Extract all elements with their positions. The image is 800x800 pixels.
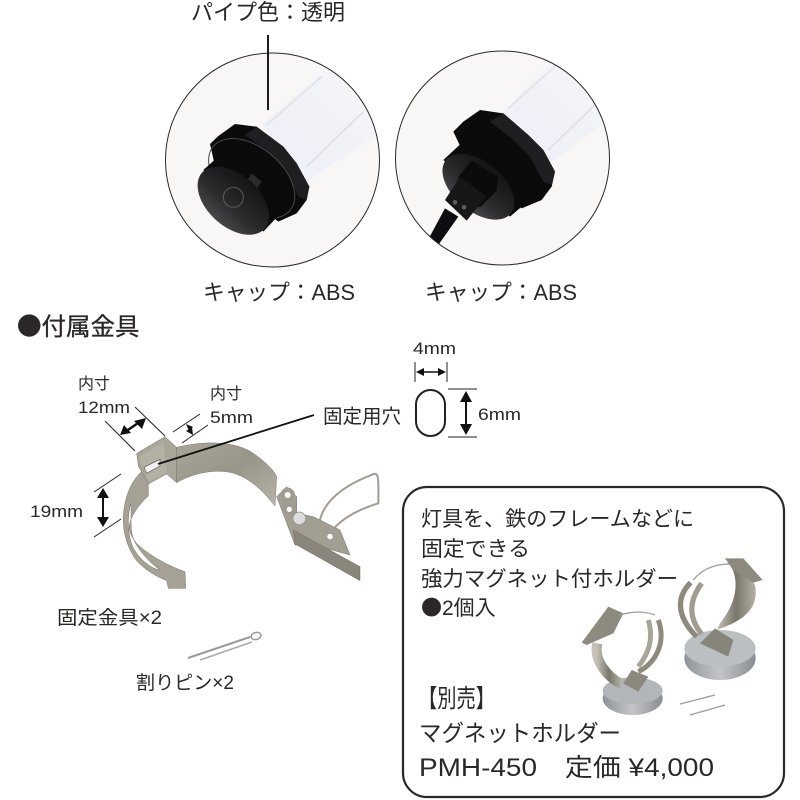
caption: bracket x2: 固定金具×2 (57, 607, 162, 629)
caption: left cap: キャップ：ABS (203, 280, 355, 305)
main band (177, 443, 277, 506)
cotter pins (680, 695, 725, 715)
cable (429, 208, 458, 245)
panel text: sold separately and price: 【別売】 (418, 685, 495, 713)
diagram: oval hole dimension (413, 339, 521, 437)
dimension: inner 12mm: 12mm (78, 398, 130, 417)
top tab (137, 437, 177, 484)
cap body right (443, 144, 521, 217)
flange ring left (208, 138, 296, 218)
diagram: fixing bracket (123, 437, 378, 588)
label: 6mm: 6mm (478, 405, 521, 424)
panel: right cap circle photo with cable (396, 51, 617, 265)
photo: magnet holders (582, 558, 763, 715)
callout: fixing hole: 固定用穴 (323, 406, 401, 428)
callout: fixing hole (158, 406, 401, 464)
dimension: inner 5mm (173, 385, 253, 443)
latch strip (277, 487, 350, 555)
label: 4mm: 4mm (413, 339, 456, 358)
dimension: inner 12mm: 内寸 (78, 375, 110, 393)
dimension: inner 12mm (78, 375, 165, 451)
hex nut left (210, 124, 309, 222)
leader line: pipe colour (267, 35, 269, 110)
panel text: sold separately and price: PMH-450 定価 ¥4,000 (419, 754, 714, 782)
hex gland nut (458, 161, 498, 207)
cable gland (445, 177, 486, 221)
dimension: 19mm (30, 474, 121, 537)
pipe right (502, 104, 566, 162)
left magnet holder (582, 607, 663, 715)
dimension: inner 5mm: 内寸 (210, 385, 242, 403)
panel text: description: ●2個入 (421, 592, 496, 622)
latch blade (293, 530, 360, 581)
panel: magnet holder (403, 487, 784, 797)
oval hole (416, 390, 445, 436)
panel text: description: 固定できる (421, 538, 530, 561)
panel text: sold separately and price: マグネットホルダー (419, 720, 621, 746)
panel: left cap circle photo (166, 53, 390, 267)
cap face right (442, 154, 514, 220)
dimension: 19mm: 19mm (30, 502, 83, 521)
wire loop (319, 474, 378, 527)
heading: included fittings: ●付属金具 (17, 308, 140, 343)
pipe left (262, 114, 332, 181)
icon: cotter pin (188, 631, 262, 660)
hex nut right (453, 110, 555, 208)
heading: pipe colour label: パイプ色：透明 (191, 0, 345, 25)
cap body left (203, 160, 277, 232)
panel text: description: 灯具を、鉄のフレームなどに (421, 508, 694, 531)
fixing slot (144, 459, 160, 473)
caption: right cap: キャップ：ABS (425, 280, 577, 305)
panel text: description: 強力マグネット付ホルダー (421, 568, 678, 591)
cap face left (198, 166, 269, 235)
panel text: description (421, 508, 694, 622)
left arm with slot (123, 472, 186, 588)
caption: cotter pin x2: 割りピン×2 (136, 672, 234, 694)
right magnet holder (680, 558, 763, 680)
dimension: inner 5mm: 5mm (210, 408, 253, 427)
panel text: sold separately and price (418, 685, 714, 782)
